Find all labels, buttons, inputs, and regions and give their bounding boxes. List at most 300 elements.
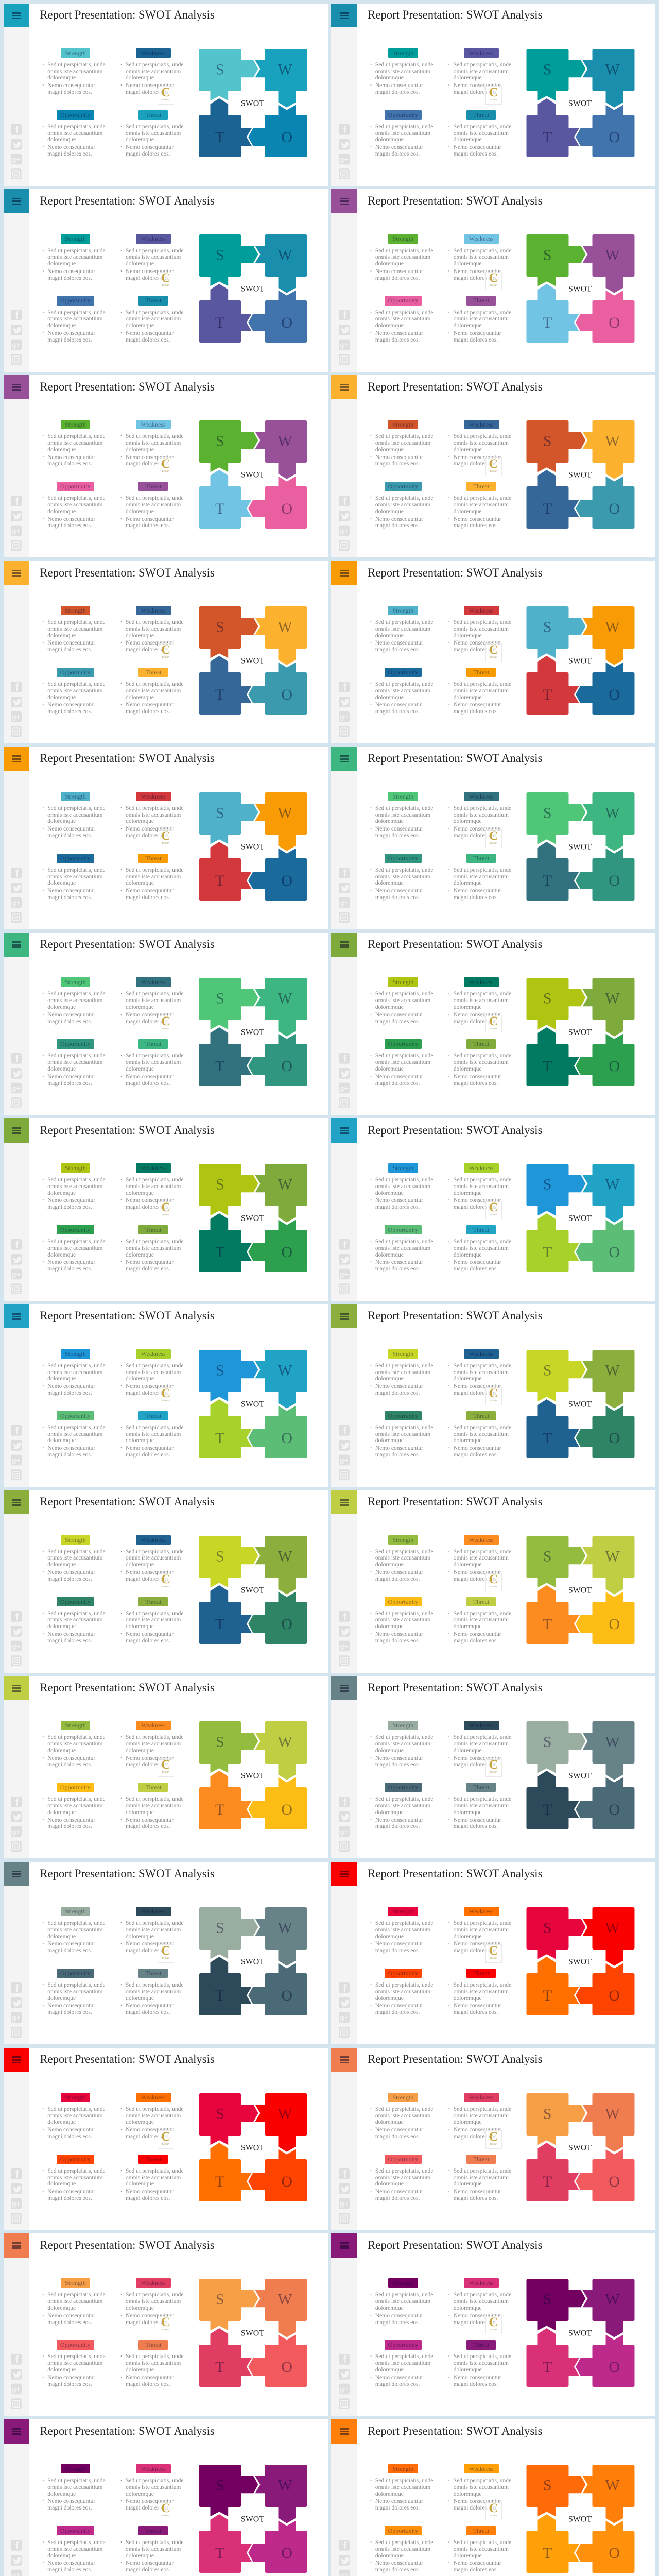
badge: Opportunity: Opportunity [388, 2527, 418, 2534]
sidebar [331, 747, 357, 929]
badge: Threat: Threat [145, 1412, 162, 1419]
list: Weakness points: magni dolores eos. [454, 1576, 498, 1582]
badge: Strength [61, 1163, 90, 1173]
title: Report Presentation: SWOT Analysis [40, 1124, 215, 1137]
SWOT puzzle diagram: O [609, 1615, 620, 1632]
badge: Weakness [136, 48, 171, 58]
SWOT puzzle diagram: T [215, 2173, 224, 2190]
list: Weakness points: Nemo consequuntur [126, 1755, 174, 1761]
list: Opportunity points: magni dolores eos. [375, 1452, 420, 1458]
list: Weakness points: Sed ut perspiciatis, unde [126, 433, 183, 439]
list: Strength points [375, 991, 433, 1025]
list: Weakness points: Sed ut perspiciatis, unde [126, 619, 183, 625]
SWOT puzzle diagram: SWOT [568, 470, 592, 479]
list: Opportunity points: Nemo consequuntur [47, 516, 95, 522]
watermark: C [489, 1386, 498, 1400]
list: Weakness points: Sed ut perspiciatis, unde [454, 1177, 511, 1183]
list: Strength points [375, 2292, 433, 2326]
badge: Weakness [136, 1163, 171, 1173]
watermark [158, 1758, 174, 1777]
list: Opportunity points [375, 681, 433, 715]
badge: Strength [388, 234, 418, 244]
list: Strength points: omnis iste accusantium [47, 812, 103, 818]
list: Opportunity points: omnis iste accusantium [47, 688, 103, 694]
list: Opportunity points: magni dolores eos. [375, 2009, 420, 2015]
badge: Strength [61, 1721, 90, 1730]
list: Strength points: Sed ut perspiciatis, unde [47, 2478, 106, 2484]
badge: Weakness: Weakness [141, 793, 166, 800]
list: Threat points: Nemo consequuntur [126, 1259, 174, 1265]
badge: Strength: Strength [393, 2465, 413, 2472]
list: Opportunity points [47, 1982, 106, 2016]
title: Report Presentation: SWOT Analysis [40, 566, 215, 579]
list: Threat points: omnis iste accusantium [126, 2360, 181, 2366]
list: Strength points: doloremque [47, 1562, 76, 1568]
list: Threat points: magni dolores eos. [126, 1823, 170, 1829]
list: Threat points: doloremque [126, 509, 154, 515]
list: Weakness points: magni dolores eos. [454, 1761, 498, 1768]
list: Strength points: doloremque [47, 1376, 76, 1382]
SWOT puzzle diagram: W [605, 804, 620, 821]
SWOT puzzle diagram: O [281, 1244, 292, 1261]
badge: Threat [466, 110, 496, 120]
list: Threat points: magni dolores eos. [454, 1452, 498, 1458]
menu button [3, 1676, 29, 1700]
list: Weakness points: magni dolores eos. [126, 647, 170, 653]
badge: Strength [388, 2093, 418, 2102]
list: Threat points: magni dolores eos. [126, 2195, 170, 2201]
SWOT puzzle diagram: S [215, 618, 224, 635]
list: Strength points [42, 62, 106, 95]
badge: Threat [466, 296, 496, 306]
badge: Strength [61, 1535, 90, 1545]
watermark: C [489, 2130, 498, 2144]
list: Strength points: omnis iste accusantium [375, 1369, 430, 1376]
badge: Threat: Threat [473, 1598, 489, 1605]
list: Weakness points: magni dolores eos. [454, 1204, 498, 1210]
list: Opportunity points: Sed ut perspiciatis, unde [47, 681, 106, 687]
list: Weakness points: omnis iste accusantium [126, 1369, 181, 1376]
list: Opportunity points: doloremque [47, 1066, 76, 1072]
watermark: C [161, 271, 170, 285]
list: Opportunity points: Sed ut perspiciatis, unde [47, 495, 106, 501]
badge: Threat [138, 668, 168, 677]
list: Strength points: doloremque [375, 1562, 404, 1568]
SWOT puzzle diagram: T [543, 1987, 552, 2004]
list: Opportunity points [375, 2353, 433, 2387]
list: Weakness points: magni dolores eos. [454, 1019, 498, 1025]
list: Opportunity points: doloremque [375, 2367, 404, 2373]
list: Opportunity points: omnis iste accusantium [375, 502, 430, 508]
list: Opportunity points: Sed ut perspiciatis, unde [375, 1982, 433, 1988]
title: Report Presentation: SWOT Analysis [368, 8, 542, 21]
badge: Weakness [136, 1907, 171, 1916]
list: Weakness points: magni dolores eos. [126, 833, 170, 839]
list: Strength points [47, 2292, 106, 2326]
list: Weakness points: Sed ut perspiciatis, unde [454, 62, 511, 68]
list: Weakness points: doloremque [126, 2491, 154, 2497]
badge: Strength: Strength [393, 607, 413, 614]
list: Weakness points: omnis iste accusantium [126, 254, 181, 260]
badge: Opportunity [57, 668, 94, 677]
list: Threat points [120, 310, 183, 343]
watermark [485, 1201, 502, 1219]
badge: Opportunity: Opportunity [60, 2527, 91, 2534]
list: Threat points: magni dolores eos. [454, 151, 498, 157]
watermark [485, 86, 502, 105]
sidebar [3, 561, 29, 743]
list: Strength points: omnis iste accusantium [47, 2484, 103, 2490]
list: Weakness points: omnis iste accusantium [454, 1369, 509, 1376]
badge: Opportunity: Opportunity [60, 1970, 91, 1977]
SWOT puzzle diagram: W [605, 1176, 620, 1193]
badge: Threat [466, 1411, 496, 1420]
SWOT puzzle diagram [331, 2048, 655, 2230]
title: Report Presentation: SWOT Analysis [368, 2425, 542, 2437]
list: Strength points: omnis iste accusantium [47, 254, 103, 260]
social icons [11, 2354, 22, 2409]
SWOT puzzle diagram: O [609, 314, 620, 331]
list: Threat points: doloremque [454, 509, 482, 515]
badge: Strength: Strength [393, 2094, 413, 2101]
list: Weakness points [448, 62, 511, 95]
badge: Strength [388, 1349, 418, 1359]
list: Opportunity points: Nemo consequuntur [47, 2560, 95, 2566]
badge: Strength [388, 48, 418, 58]
list: Strength points: Sed ut perspiciatis, unde [47, 433, 106, 439]
social icons [339, 868, 350, 923]
badge: Strength: Strength [393, 49, 413, 57]
badge: Weakness [464, 1907, 499, 1916]
list: Opportunity points: doloremque [375, 2553, 404, 2559]
list: Opportunity points: doloremque [375, 2181, 404, 2187]
list: Opportunity points: omnis iste accusantium [375, 1245, 430, 1251]
badge: Weakness: Weakness [141, 978, 166, 986]
list: Strength points: Nemo consequuntur [47, 640, 95, 646]
list: Weakness points: omnis iste accusantium [454, 2484, 509, 2490]
slide 13: SWOT analysis [3, 1118, 328, 1301]
list: Weakness points [126, 1177, 183, 1211]
list: Strength points: doloremque [375, 1748, 404, 1754]
SWOT puzzle diagram: S [215, 1176, 224, 1193]
SWOT puzzle diagram: W [278, 1176, 292, 1193]
SWOT puzzle diagram: W [605, 2477, 620, 2494]
menu button [331, 2233, 357, 2258]
SWOT puzzle diagram: S [543, 2105, 552, 2122]
SWOT puzzle diagram [3, 1304, 328, 1487]
list: Threat points: doloremque [126, 137, 154, 143]
badge: Opportunity: Opportunity [388, 111, 418, 118]
list: Weakness points: magni dolores eos. [126, 1947, 170, 1954]
list: Weakness points: Nemo consequuntur [126, 268, 174, 275]
list: Strength points: Sed ut perspiciatis, unde [47, 2106, 106, 2112]
SWOT puzzle diagram: S [215, 990, 224, 1007]
list: Weakness points: Sed ut perspiciatis, unde [126, 2478, 183, 2484]
list: Strength points: omnis iste accusantium [375, 2484, 430, 2490]
badge: Weakness: Weakness [141, 1908, 166, 1915]
list: Opportunity points: Sed ut perspiciatis, unde [375, 681, 433, 687]
watermark [158, 1201, 174, 1219]
list: Opportunity points: Sed ut perspiciatis, unde [375, 124, 433, 130]
list: Threat points: doloremque [126, 2553, 154, 2559]
badge: Weakness: Weakness [141, 2465, 166, 2472]
list: Threat points: doloremque [454, 323, 482, 329]
list: Opportunity points [47, 1796, 106, 1830]
SWOT puzzle diagram: T [543, 1058, 552, 1075]
list: Threat points: magni dolores eos. [454, 1266, 498, 1272]
list: Opportunity points: Sed ut perspiciatis, unde [375, 1239, 433, 1245]
list: Strength points: omnis iste accusantium [47, 626, 103, 632]
list: Threat points: magni dolores eos. [126, 2009, 170, 2015]
list: Threat points: Nemo consequuntur [126, 702, 174, 708]
list: Opportunity points: Nemo consequuntur [375, 2560, 423, 2566]
list: Strength points: doloremque [47, 447, 76, 453]
badge: Opportunity [385, 1039, 422, 1049]
SWOT puzzle diagram [331, 2233, 655, 2416]
SWOT puzzle diagram: SWOT [568, 2143, 592, 2152]
badge: Opportunity: Opportunity [60, 1598, 91, 1605]
list: Weakness points: magni dolores eos. [126, 1761, 170, 1768]
SWOT puzzle diagram [3, 2048, 328, 2230]
list: Opportunity points [375, 2539, 433, 2573]
list: Strength points: magni dolores eos. [375, 89, 420, 95]
list: Threat points [126, 867, 183, 901]
SWOT puzzle diagram [331, 933, 655, 1115]
list: Threat points [120, 124, 183, 157]
badge: Threat [138, 1969, 168, 1978]
SWOT puzzle diagram: S [215, 247, 224, 264]
sidebar [3, 933, 29, 1115]
watermark: DESIGN [490, 470, 497, 472]
list: Threat points: omnis iste accusantium [126, 2546, 181, 2552]
badge: Opportunity: Opportunity [388, 483, 418, 490]
list: Weakness points [454, 1363, 511, 1397]
list: Strength points [375, 1920, 433, 1954]
list: Threat points: magni dolores eos. [454, 1823, 498, 1829]
SWOT puzzle diagram: T [543, 500, 552, 517]
list: Weakness points [454, 1549, 511, 1583]
list: Weakness points: omnis iste accusantium [126, 812, 181, 818]
badge: Strength: Strength [65, 1164, 86, 1172]
list: Weakness points: omnis iste accusantium [454, 254, 509, 260]
list: Threat points: Sed ut perspiciatis, unde [454, 495, 511, 501]
title: Report Presentation: SWOT Analysis [40, 938, 215, 951]
badge: Weakness: Weakness [141, 1722, 166, 1729]
watermark [158, 2502, 174, 2520]
badge: Opportunity [385, 296, 422, 306]
watermark: C [489, 2501, 498, 2515]
list: Opportunity points: Nemo consequuntur [47, 2189, 95, 2195]
list: Opportunity points [375, 1611, 433, 1645]
list: Threat points: doloremque [454, 1437, 482, 1444]
watermark: C [489, 643, 498, 657]
watermark: C [489, 457, 498, 471]
slide 24: SWOT analysis [331, 2048, 655, 2230]
SWOT puzzle diagram: SWOT [568, 2329, 592, 2338]
list: Opportunity points: magni dolores eos. [375, 2567, 420, 2573]
list: Weakness points: doloremque [126, 75, 154, 81]
list: Weakness points: Sed ut perspiciatis, unde [126, 1920, 183, 1926]
list: Threat points: doloremque [454, 694, 482, 701]
list: Strength points: magni dolores eos. [375, 2133, 420, 2140]
list: Strength points [375, 1549, 433, 1583]
sidebar [3, 2233, 29, 2416]
list: Weakness points: Sed ut perspiciatis, unde [126, 2292, 183, 2298]
title: Report Presentation: SWOT Analysis [40, 752, 215, 765]
badge: Strength [61, 1907, 90, 1916]
title: Report Presentation: SWOT Analysis [40, 2425, 215, 2437]
list: Opportunity points: omnis iste accusantium [47, 2175, 103, 2181]
list: Weakness points: omnis iste accusantium [126, 2298, 181, 2304]
list: Weakness points [126, 2106, 183, 2140]
list: Opportunity points: omnis iste accusantium [47, 1059, 103, 1065]
badge: Opportunity [385, 668, 422, 677]
badge: Opportunity: Opportunity [388, 1598, 418, 1605]
list: Threat points [454, 1239, 511, 1273]
badge: Opportunity [385, 482, 422, 491]
list: Opportunity points: Nemo consequuntur [375, 1445, 423, 1451]
watermark: DESIGN [490, 98, 497, 101]
list: Strength points: magni dolores eos. [47, 1576, 92, 1582]
list: Threat points [454, 1611, 511, 1645]
badge: Strength: Strength [65, 235, 86, 242]
menu button [331, 561, 357, 585]
list: Threat points [126, 2168, 183, 2202]
SWOT puzzle diagram: W [605, 432, 620, 449]
list: Strength points: Sed ut perspiciatis, unde [47, 991, 106, 997]
list: Threat points: Sed ut perspiciatis, unde [126, 867, 183, 873]
list: Strength points: Sed ut perspiciatis, unde [47, 805, 106, 811]
list: Threat points: Nemo consequuntur [126, 1074, 174, 1080]
list: Strength points: doloremque [375, 447, 404, 453]
list: Strength points [47, 1734, 106, 1768]
badge: Strength [388, 1907, 418, 1916]
social icons [339, 1797, 350, 1852]
social icons [11, 496, 22, 551]
list: Weakness points: doloremque [126, 1004, 154, 1010]
list: Weakness points: omnis iste accusantium [126, 626, 181, 632]
list: Opportunity points: Sed ut perspiciatis, unde [47, 124, 106, 130]
social icons [339, 2354, 350, 2409]
list: Weakness points: magni dolores eos. [126, 275, 170, 281]
badge: Weakness [136, 792, 171, 801]
SWOT puzzle diagram: S [543, 618, 552, 635]
list: Opportunity points [47, 1425, 106, 1459]
SWOT puzzle diagram: S [215, 432, 224, 449]
list: Opportunity points [375, 2168, 433, 2202]
list: Threat points [126, 2353, 183, 2387]
list: Threat points: doloremque [454, 880, 482, 886]
list: Opportunity points: omnis iste accusantium [375, 1803, 430, 1809]
SWOT puzzle diagram: T [543, 2545, 552, 2562]
list: Threat points: Nemo consequuntur [126, 2003, 174, 2009]
menu button [331, 1676, 357, 1700]
list: Threat points: Sed ut perspiciatis, unde [126, 2353, 183, 2360]
badge: Strength [388, 1721, 418, 1730]
badge: Weakness: Weakness [469, 1722, 494, 1729]
list: Threat points: omnis iste accusantium [454, 1617, 509, 1623]
SWOT puzzle diagram: SWOT [568, 1586, 592, 1595]
list: Weakness points: Sed ut perspiciatis, unde [126, 1734, 183, 1740]
list: Strength points: omnis iste accusantium [375, 69, 430, 75]
watermark [485, 2130, 502, 2149]
watermark [485, 2316, 502, 2334]
list: Weakness points: Nemo consequuntur [454, 1197, 501, 1204]
badge: Threat [138, 2155, 168, 2164]
badge: Opportunity: Opportunity [388, 2341, 418, 2348]
SWOT puzzle diagram: T [215, 1987, 224, 2004]
sidebar [3, 4, 29, 186]
badge: Opportunity: Opportunity [60, 669, 91, 676]
list: Opportunity points [47, 1239, 106, 1273]
list: Threat points: Sed ut perspiciatis, unde [126, 1425, 183, 1431]
list: Threat points: Sed ut perspiciatis, unde [126, 124, 183, 130]
list: Opportunity points: omnis iste accusantium [375, 1059, 430, 1065]
badge: Opportunity: Opportunity [60, 1784, 91, 1791]
list: Weakness points: doloremque [126, 1934, 154, 1940]
list: Opportunity points: omnis iste accusantium [375, 688, 430, 694]
list: Threat points [448, 124, 511, 157]
SWOT puzzle diagram [526, 420, 634, 529]
badge: Weakness: Weakness [469, 49, 494, 57]
badge: Weakness: Weakness [469, 235, 494, 242]
list: Opportunity points: omnis iste accusantium [47, 874, 103, 880]
list: Opportunity points [371, 495, 433, 529]
list: Threat points: Sed ut perspiciatis, unde [126, 1611, 183, 1617]
list: Threat points: doloremque [126, 880, 154, 886]
SWOT puzzle diagram: S [543, 1176, 552, 1193]
SWOT puzzle diagram: SWOT [568, 1214, 592, 1223]
menu button [3, 747, 29, 771]
sidebar [3, 1490, 29, 1673]
list: Threat points: doloremque [126, 1623, 154, 1630]
list: Weakness points: omnis iste accusantium [126, 1927, 181, 1933]
badge: Weakness: Weakness [469, 2279, 494, 2286]
list: Weakness points: omnis iste accusantium [454, 1741, 509, 1747]
watermark [485, 1944, 502, 1963]
SWOT puzzle diagram: W [605, 618, 620, 635]
list: Strength points [371, 62, 433, 95]
list: Strength points: Nemo consequuntur [47, 1197, 95, 1204]
SWOT puzzle diagram: SWOT [240, 470, 264, 479]
sidebar [3, 747, 29, 929]
sidebar [3, 189, 29, 372]
SWOT puzzle diagram: O [609, 2173, 620, 2190]
list: Opportunity points: doloremque [375, 137, 404, 143]
list: Strength points [47, 2106, 106, 2140]
list: Weakness points: Sed ut perspiciatis, unde [126, 1549, 183, 1555]
sidebar [331, 1304, 357, 1487]
list: Threat points: doloremque [126, 1809, 154, 1816]
badge: Threat: Threat [145, 1040, 162, 1047]
badge: Weakness: Weakness [469, 1350, 494, 1358]
list: Opportunity points: Nemo consequuntur [375, 330, 423, 336]
SWOT puzzle diagram: T [215, 1430, 224, 1447]
slide 6: SWOT analysis [331, 375, 655, 557]
list: Opportunity points: omnis iste accusantium [47, 502, 103, 508]
SWOT puzzle diagram [331, 1118, 655, 1301]
list: Opportunity points: magni dolores eos. [47, 1266, 92, 1272]
list: Opportunity points: Nemo consequuntur [375, 2003, 423, 2009]
watermark [485, 457, 502, 476]
SWOT puzzle diagram: W [605, 1362, 620, 1379]
list: Opportunity points: omnis iste accusantium [47, 1803, 103, 1809]
SWOT puzzle diagram: W [278, 1362, 292, 1379]
badge: Strength: Strength [65, 978, 86, 986]
list: Opportunity points: Nemo consequuntur [47, 1445, 95, 1451]
SWOT puzzle diagram: O [281, 2545, 292, 2562]
watermark: DESIGN [162, 470, 169, 472]
